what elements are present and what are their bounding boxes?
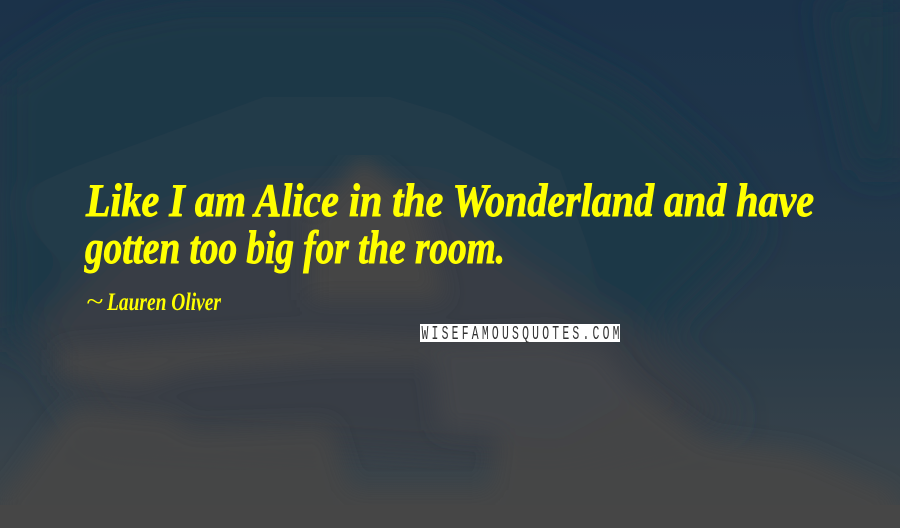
author attribution	[86, 287, 221, 316]
quote text	[84, 175, 814, 274]
author attribution: ~	[86, 287, 103, 316]
author attribution: Lauren Oliver	[106, 289, 221, 316]
quote text: gotten too big for the room.	[84, 222, 505, 274]
watermark: WISEFAMOUSQUOTES.COM	[422, 323, 620, 345]
